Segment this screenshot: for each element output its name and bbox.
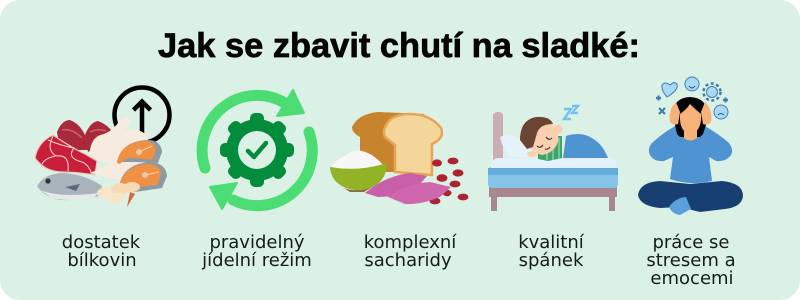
blanket (563, 134, 608, 158)
label: pravidelný jídelní režim (201, 232, 312, 271)
chicken (90, 116, 150, 180)
label: dostatek bílkovin: dostatek (62, 232, 141, 253)
sleep z letters (564, 106, 578, 119)
icon: up arrow in circle (114, 88, 170, 142)
label: práce se stresem a emocemi (646, 232, 736, 289)
dark steaks (57, 120, 111, 152)
floating emotion symbols (656, 77, 728, 119)
label: práce se stresem a emocemi: práce se (652, 232, 730, 253)
salmon steaks (117, 140, 167, 192)
neck (684, 128, 697, 140)
icon: woman meditating (638, 77, 743, 215)
beef (35, 135, 97, 175)
sweater torso and arms (649, 125, 732, 183)
label: práce se stresem a emocemi: emocemi (650, 268, 734, 289)
pillow (500, 135, 532, 157)
label: kvalitní spánek: spánek (519, 250, 584, 271)
crossed legs (638, 181, 743, 212)
bed legs (491, 196, 615, 211)
cycle arrows (202, 90, 312, 209)
label: dostatek bílkovin: bílkovin (67, 250, 137, 271)
icon: protein foods with up arrow (35, 88, 170, 207)
mattress (488, 158, 618, 188)
label: kvalitní spánek (518, 232, 585, 271)
label: komplexní sacharidy (364, 232, 457, 271)
icon: complex carbohydrates (330, 112, 468, 204)
label: pravidelný jídelní režim: pravidelný (209, 232, 305, 253)
scarf (538, 136, 562, 161)
label: pravidelný jídelní režim: jídelní režim (201, 250, 312, 271)
foot (669, 197, 691, 215)
label: komplexní sacharidy: sacharidy (364, 250, 452, 271)
label: komplexní sacharidy: komplexní (364, 232, 457, 253)
bed frame (489, 187, 617, 197)
sweet potatoes (365, 173, 451, 204)
label: kvalitní spánek: kvalitní (518, 232, 585, 253)
icon: regular meal schedule gear (202, 90, 312, 209)
child's head (520, 117, 562, 157)
face (680, 104, 701, 134)
bread loaf (352, 112, 442, 175)
rice bowl (330, 151, 387, 192)
title: Jak se zbavit chutí na sladké: (158, 27, 640, 65)
headboard (493, 112, 503, 162)
icon: child sleeping in bed (488, 106, 618, 211)
label: dostatek bílkovin (62, 232, 141, 271)
hands (670, 102, 711, 125)
hair back (673, 97, 707, 137)
label: práce se stresem a emocemi: stresem a (646, 250, 736, 271)
gear with check (220, 113, 294, 187)
beans (430, 158, 468, 204)
shrimp (97, 182, 140, 207)
fish (37, 173, 102, 200)
